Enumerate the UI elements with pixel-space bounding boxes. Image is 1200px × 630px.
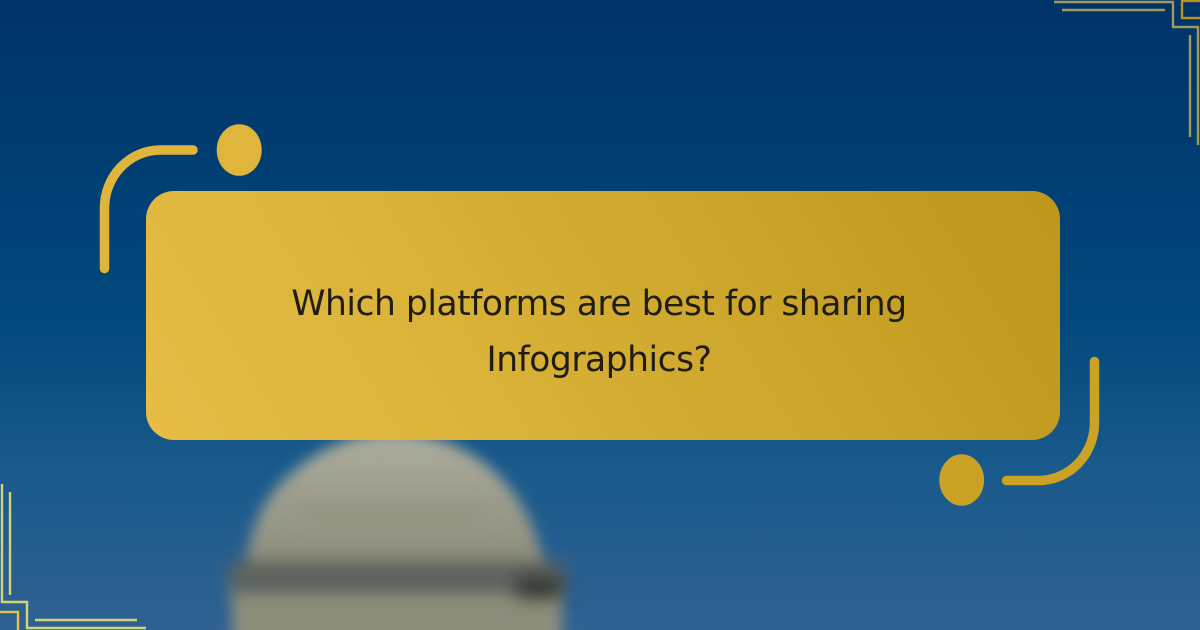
question panel: [146, 191, 1060, 440]
question heading: [291, 284, 907, 380]
question panel: Infographics?: [486, 340, 712, 380]
question panel: Which platforms are best for sharing: [291, 284, 907, 324]
